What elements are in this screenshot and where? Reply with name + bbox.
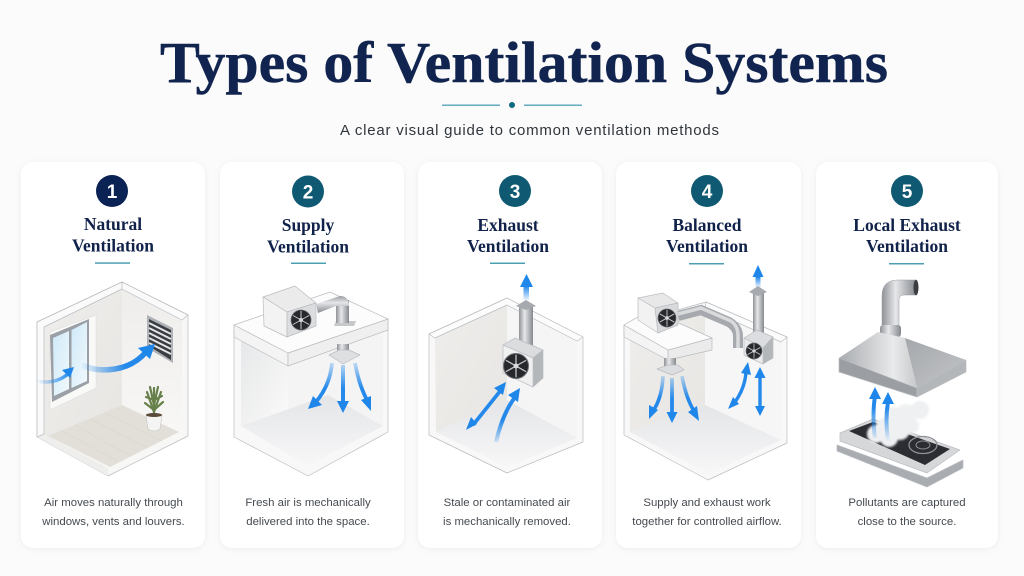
arrow: exhaust up [520, 274, 533, 300]
caption [632, 497, 782, 528]
caption: Fresh air is mechanically [245, 497, 371, 509]
shelf [624, 310, 712, 360]
card background [21, 162, 205, 548]
arrow: air entering [36, 367, 74, 382]
panel: exhaust ventilation [418, 162, 602, 548]
caption: windows, vents and louvers. [41, 516, 185, 528]
illustration: room with exhaust fan [429, 274, 583, 473]
heading: Supply [282, 215, 335, 235]
heading: Ventilation [467, 236, 549, 256]
arrows: exhaust air [728, 362, 766, 416]
illustration: room with supply and exhaust [624, 265, 787, 480]
caption [848, 497, 966, 528]
heading: Ventilation [666, 236, 748, 256]
arrows: supply air [308, 363, 371, 413]
card background [616, 162, 801, 548]
caption: Supply and exhaust work [643, 497, 771, 509]
card background [220, 162, 404, 548]
arrows: supply air [649, 376, 699, 423]
heading rule [490, 262, 525, 264]
badge 1: 1 [107, 182, 118, 203]
caption: Pollutants are captured [848, 497, 966, 509]
heading [267, 215, 349, 256]
duct and cap [516, 300, 536, 350]
heading rule [291, 262, 326, 264]
plant [145, 387, 163, 431]
illustration: room with window and louver [36, 282, 188, 476]
duct run [678, 310, 738, 348]
heading [467, 215, 549, 256]
arrow: exhaust up [752, 265, 764, 287]
title ornament [442, 102, 582, 108]
heading [72, 214, 154, 256]
badge 3: 3 [510, 182, 520, 203]
panel: balanced ventilation [616, 162, 801, 548]
panel: supply ventilation [220, 162, 404, 548]
heading: Balanced [672, 215, 742, 235]
louver [147, 315, 173, 363]
hood duct [880, 280, 918, 337]
card background [816, 162, 998, 548]
arrows: exhaust air [466, 382, 520, 442]
supply unit [638, 293, 678, 333]
smoke [867, 401, 929, 447]
heading: Local Exhaust [853, 215, 961, 235]
badge 2: 2 [303, 182, 313, 204]
subtitle: A clear visual guide to common ventilation methods [340, 122, 719, 139]
badge 1 [96, 175, 128, 207]
heading rule [689, 263, 724, 264]
caption [41, 497, 185, 528]
caption [245, 497, 371, 528]
heading rule [889, 263, 924, 264]
heading: Ventilation [267, 236, 349, 256]
panel: natural ventilation [21, 162, 205, 548]
fan box [503, 338, 543, 387]
heading [853, 215, 961, 256]
badge 5: 5 [902, 182, 913, 203]
heading rule [95, 262, 130, 264]
heading: Exhaust [477, 215, 539, 235]
caption: is mechanically removed. [443, 516, 571, 528]
arrow: air to louver [82, 344, 155, 370]
stove [837, 419, 963, 487]
caption: close to the source. [858, 516, 956, 528]
badge 3 [499, 175, 531, 207]
caption: together for controlled airflow. [632, 516, 782, 528]
illustration: room with supply unit [234, 286, 388, 476]
hood [839, 332, 966, 397]
exhaust stack [744, 286, 773, 364]
heading: Ventilation [72, 236, 154, 256]
outdoor supply unit [263, 286, 356, 337]
title: Types of Ventilation Systems [160, 30, 888, 95]
caption: delivered into the space. [246, 516, 370, 528]
heading: Ventilation [866, 236, 948, 256]
arrows: captured pollutants [869, 387, 894, 441]
panel: local exhaust ventilation [816, 162, 998, 548]
heading: Natural [84, 214, 142, 234]
caption [443, 497, 571, 528]
card background [418, 162, 602, 548]
badge 2 [292, 176, 324, 208]
caption: Air moves naturally through [44, 497, 183, 509]
diffuser [657, 358, 684, 375]
window [50, 315, 96, 410]
caption: Stale or contaminated air [444, 497, 571, 509]
badge 5 [891, 175, 923, 207]
badge 4: 4 [702, 182, 713, 203]
heading [666, 215, 748, 256]
ceiling diffuser [329, 344, 360, 364]
illustration: hood over source [837, 280, 966, 487]
badge 4 [691, 175, 723, 207]
